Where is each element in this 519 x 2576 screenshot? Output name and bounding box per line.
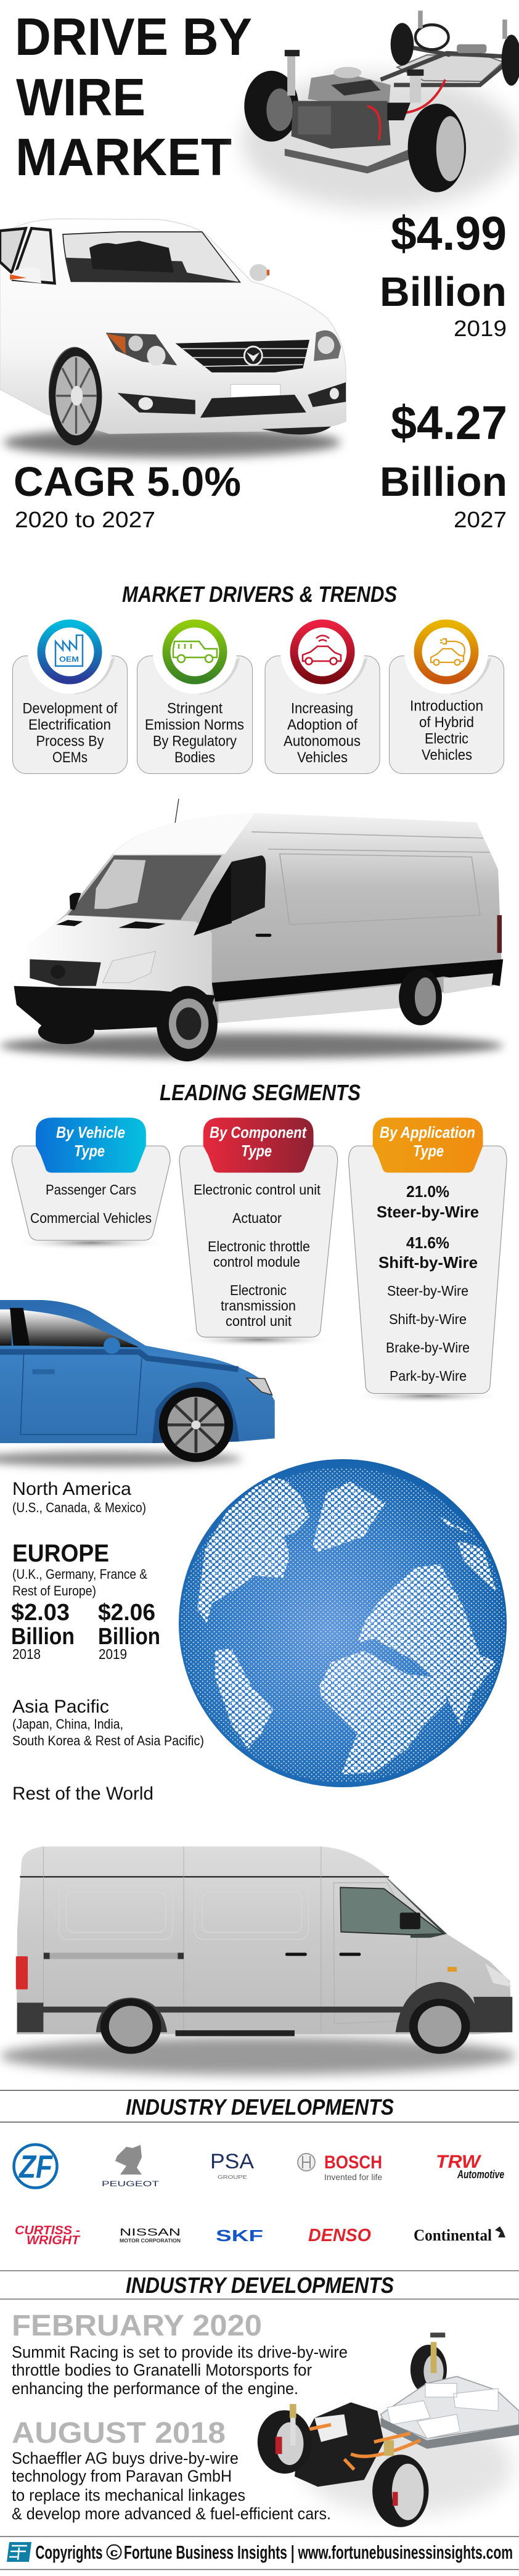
logo: ZF: ZF	[18, 2149, 53, 2185]
market size 2019	[380, 207, 507, 341]
heading: industry developments (news)	[0, 2271, 519, 2299]
logo: Peugeot: PEUGEOT	[102, 2179, 160, 2188]
panel: by application type: 21.0%	[406, 1182, 449, 1201]
logo: TRW Automotive	[436, 2152, 504, 2181]
icon: SUV	[173, 641, 217, 662]
title	[15, 8, 252, 187]
title: DRIVE BY	[15, 8, 252, 67]
panel: by application type: Type	[413, 1142, 444, 1160]
footer: Copyrights	[36, 2541, 102, 2563]
panel: by component type: Electronic	[230, 1282, 287, 1298]
panel: by application type	[348, 1117, 507, 1404]
image: grey side-view van	[0, 1846, 517, 2075]
news: August 2018: technology from Paravan GmbH	[12, 2467, 232, 2485]
icon: electric car plug	[431, 639, 465, 665]
panel: by vehicle type: Type	[74, 1142, 105, 1160]
panel: by component type: Type	[241, 1142, 272, 1160]
panel: by application type: Brake-by-Wire	[386, 1339, 470, 1356]
news: August 2018: & develop more advanced & fuel-efficient cars.	[12, 2504, 331, 2523]
news: February 2020: enhancing the performance of the engine.	[12, 2379, 298, 2398]
news: August 2018: Schaeffler AG buys drive-by-wire	[12, 2449, 239, 2467]
region: Europe: 2018	[12, 1646, 41, 1662]
panel: by vehicle type: By Vehicle	[56, 1123, 125, 1142]
region: Europe: Rest of Europe)	[12, 1583, 96, 1599]
heading: market drivers and trends: MARKET DRIVERS & TRENDS	[122, 582, 397, 607]
region: Asia Pacific: South Korea & Rest of Asia Pacific)	[12, 1733, 204, 1748]
logo: Curtiss-Wright: WRIGHT	[27, 2234, 81, 2247]
logo: Bosch	[298, 2152, 382, 2182]
image: blue sedan	[0, 1300, 275, 1467]
panel: emission norms driver: Stringent	[167, 701, 223, 717]
panel: by application type: Steer-by-Wire	[377, 1203, 479, 1221]
panel: by application type: By Application	[380, 1123, 475, 1142]
panel: by vehicle type: Commercial Vehicles	[30, 1210, 152, 1226]
news: August 2018	[12, 2417, 331, 2523]
panel: by component type	[179, 1117, 338, 1347]
market size 2019: Billion	[380, 269, 507, 315]
heading: industry developments (news): INDUSTRY DEVELOPMENTS	[126, 2273, 394, 2298]
panel: by application type: Steer-by-Wire	[387, 1283, 468, 1299]
logo: Peugeot	[102, 2145, 160, 2188]
logo: Denso: DENSO	[308, 2226, 371, 2245]
panel: emission norms driver: Emission Norms	[145, 717, 244, 733]
footer	[0, 2537, 519, 2569]
region: Rest of the World: Rest of the World	[12, 1784, 153, 1804]
news: February 2020: FEBRUARY 2020	[12, 2310, 262, 2342]
region: North America: North America	[12, 1479, 131, 1499]
panel: autonomous vehicles driver: Adoption of	[287, 717, 358, 733]
panel: autonomous vehicles driver	[265, 610, 380, 773]
CAGR: 2020 to 2027	[15, 507, 155, 532]
news: August 2018: to replace its mechanical linkages	[12, 2486, 245, 2504]
market size 2027	[380, 397, 507, 532]
title: MARKET	[15, 128, 232, 187]
panel: emission norms driver: Bodies	[174, 749, 215, 766]
logo: Nissan: NISSAN	[120, 2226, 181, 2238]
panel: electrification driver: OEMs	[52, 749, 88, 766]
region: Asia Pacific	[12, 1697, 204, 1748]
region: Europe: (U.K., Germany, France &	[12, 1566, 147, 1582]
news: August 2018: AUGUST 2018	[12, 2417, 226, 2450]
panel: by vehicle type	[12, 1117, 170, 1250]
icon: Fortune Business Insights logo	[7, 2542, 31, 2562]
market size 2019: $4.99	[391, 207, 507, 260]
news: February 2020: Summit Racing is set to provide its drive-by-wire	[12, 2343, 348, 2361]
image: white sedan	[0, 219, 346, 458]
panel: by application type: Shift-by-Wire	[389, 1311, 467, 1327]
market size 2027: $4.27	[391, 397, 507, 450]
logo: Nissan: MOTOR CORPORATION	[120, 2237, 181, 2244]
heading: industry developments (companies)	[0, 2091, 519, 2122]
region: Europe: Billion	[11, 1624, 75, 1650]
panel: hybrid electric vehicles driver: Introduction	[410, 698, 483, 714]
logo: Nissan	[120, 2226, 181, 2244]
CAGR	[14, 459, 241, 532]
region: Asia Pacific: (Japan, China, India,	[12, 1716, 123, 1732]
image: drive-by-wire chassis	[242, 10, 519, 209]
panel: autonomous vehicles driver: Vehicles	[297, 749, 348, 766]
footer: c	[110, 2546, 118, 2559]
logo: Bosch: Invented for life	[324, 2172, 382, 2182]
panel: emission norms driver: By Regulatory	[153, 733, 237, 750]
icon: OEM factory	[55, 635, 83, 666]
panel: by application type: Park-by-Wire	[390, 1368, 467, 1384]
panel: by vehicle type: Passenger Cars	[46, 1182, 136, 1198]
logo: TRW Automotive: TRW	[436, 2152, 482, 2172]
region: North America: (U.S., Canada, & Mexico)	[12, 1500, 146, 1515]
region: Europe: $2.06	[98, 1600, 155, 1626]
logo: Curtiss-Wright	[15, 2224, 81, 2247]
panel: by component type: Electronic control unit	[194, 1182, 321, 1198]
market size 2019: 2019	[454, 316, 507, 341]
panel: by component type: Electronic throttle	[208, 1238, 310, 1254]
panel: hybrid electric vehicles driver	[390, 610, 504, 773]
panel: electrification driver: Development of	[22, 701, 118, 717]
image: white cargo van	[0, 799, 503, 1061]
panel: by component type: control unit	[226, 1313, 292, 1329]
logo: PSA Groupe: GROUPE	[218, 2175, 247, 2180]
heading: industry developments (companies): INDUSTRY DEVELOPMENTS	[126, 2094, 394, 2120]
image: EV chassis	[258, 2335, 519, 2527]
panel: by component type: control module	[213, 1254, 300, 1270]
panel: electrification driver: Electrification	[28, 717, 111, 733]
logo: Bosch: BOSCH	[324, 2152, 382, 2173]
panel: by component type: Actuator	[232, 1210, 282, 1226]
panel: hybrid electric vehicles driver: of Hybrid	[419, 714, 474, 731]
region: Europe: Billion	[98, 1624, 160, 1650]
panel: by application type: 41.6%	[406, 1233, 449, 1252]
panel: emission norms driver	[137, 610, 253, 773]
panel: electrification driver: Process By	[36, 733, 104, 750]
logo: SKF: SKF	[216, 2226, 263, 2245]
news: February 2020	[12, 2310, 348, 2398]
panel: by application type: Shift-by-Wire	[378, 1253, 478, 1272]
panel: hybrid electric vehicles driver: Vehicles	[422, 747, 472, 763]
panel: by component type: transmission	[221, 1298, 296, 1314]
region: Europe: 2019	[99, 1646, 127, 1662]
logo: Curtiss-Wright: CURTISS -	[15, 2224, 80, 2237]
panel: hybrid electric vehicles driver: Electric	[425, 730, 468, 747]
market size 2027: Billion	[380, 459, 507, 505]
icon: OEM factory: OEM	[59, 655, 79, 664]
region: Asia Pacific: Asia Pacific	[12, 1697, 109, 1717]
panel: autonomous vehicles driver: Increasing	[291, 701, 353, 717]
region: Europe: $2.03	[11, 1600, 70, 1626]
logo: Continental: Continental	[414, 2226, 492, 2244]
region: Europe	[11, 1540, 160, 1662]
image: dotted globe	[179, 1459, 507, 1787]
title: WIRE	[16, 68, 145, 127]
panel: autonomous vehicles driver: Autonomous	[284, 733, 361, 750]
heading: leading segments: LEADING SEGMENTS	[160, 1080, 361, 1105]
icon: connected car	[303, 635, 341, 665]
panel: by component type: By Component	[210, 1123, 307, 1142]
news: February 2020: throttle bodies to Granatelli Motorsports for	[12, 2361, 312, 2379]
panel: electrification driver	[12, 610, 127, 773]
logo: TRW Automotive: Automotive	[457, 2168, 504, 2181]
region: North America	[12, 1479, 146, 1515]
CAGR: CAGR 5.0%	[14, 459, 241, 505]
market size 2027: 2027	[454, 507, 507, 532]
region: Europe: EUROPE	[12, 1540, 109, 1567]
logo: PSA Groupe: PSA	[210, 2150, 254, 2173]
